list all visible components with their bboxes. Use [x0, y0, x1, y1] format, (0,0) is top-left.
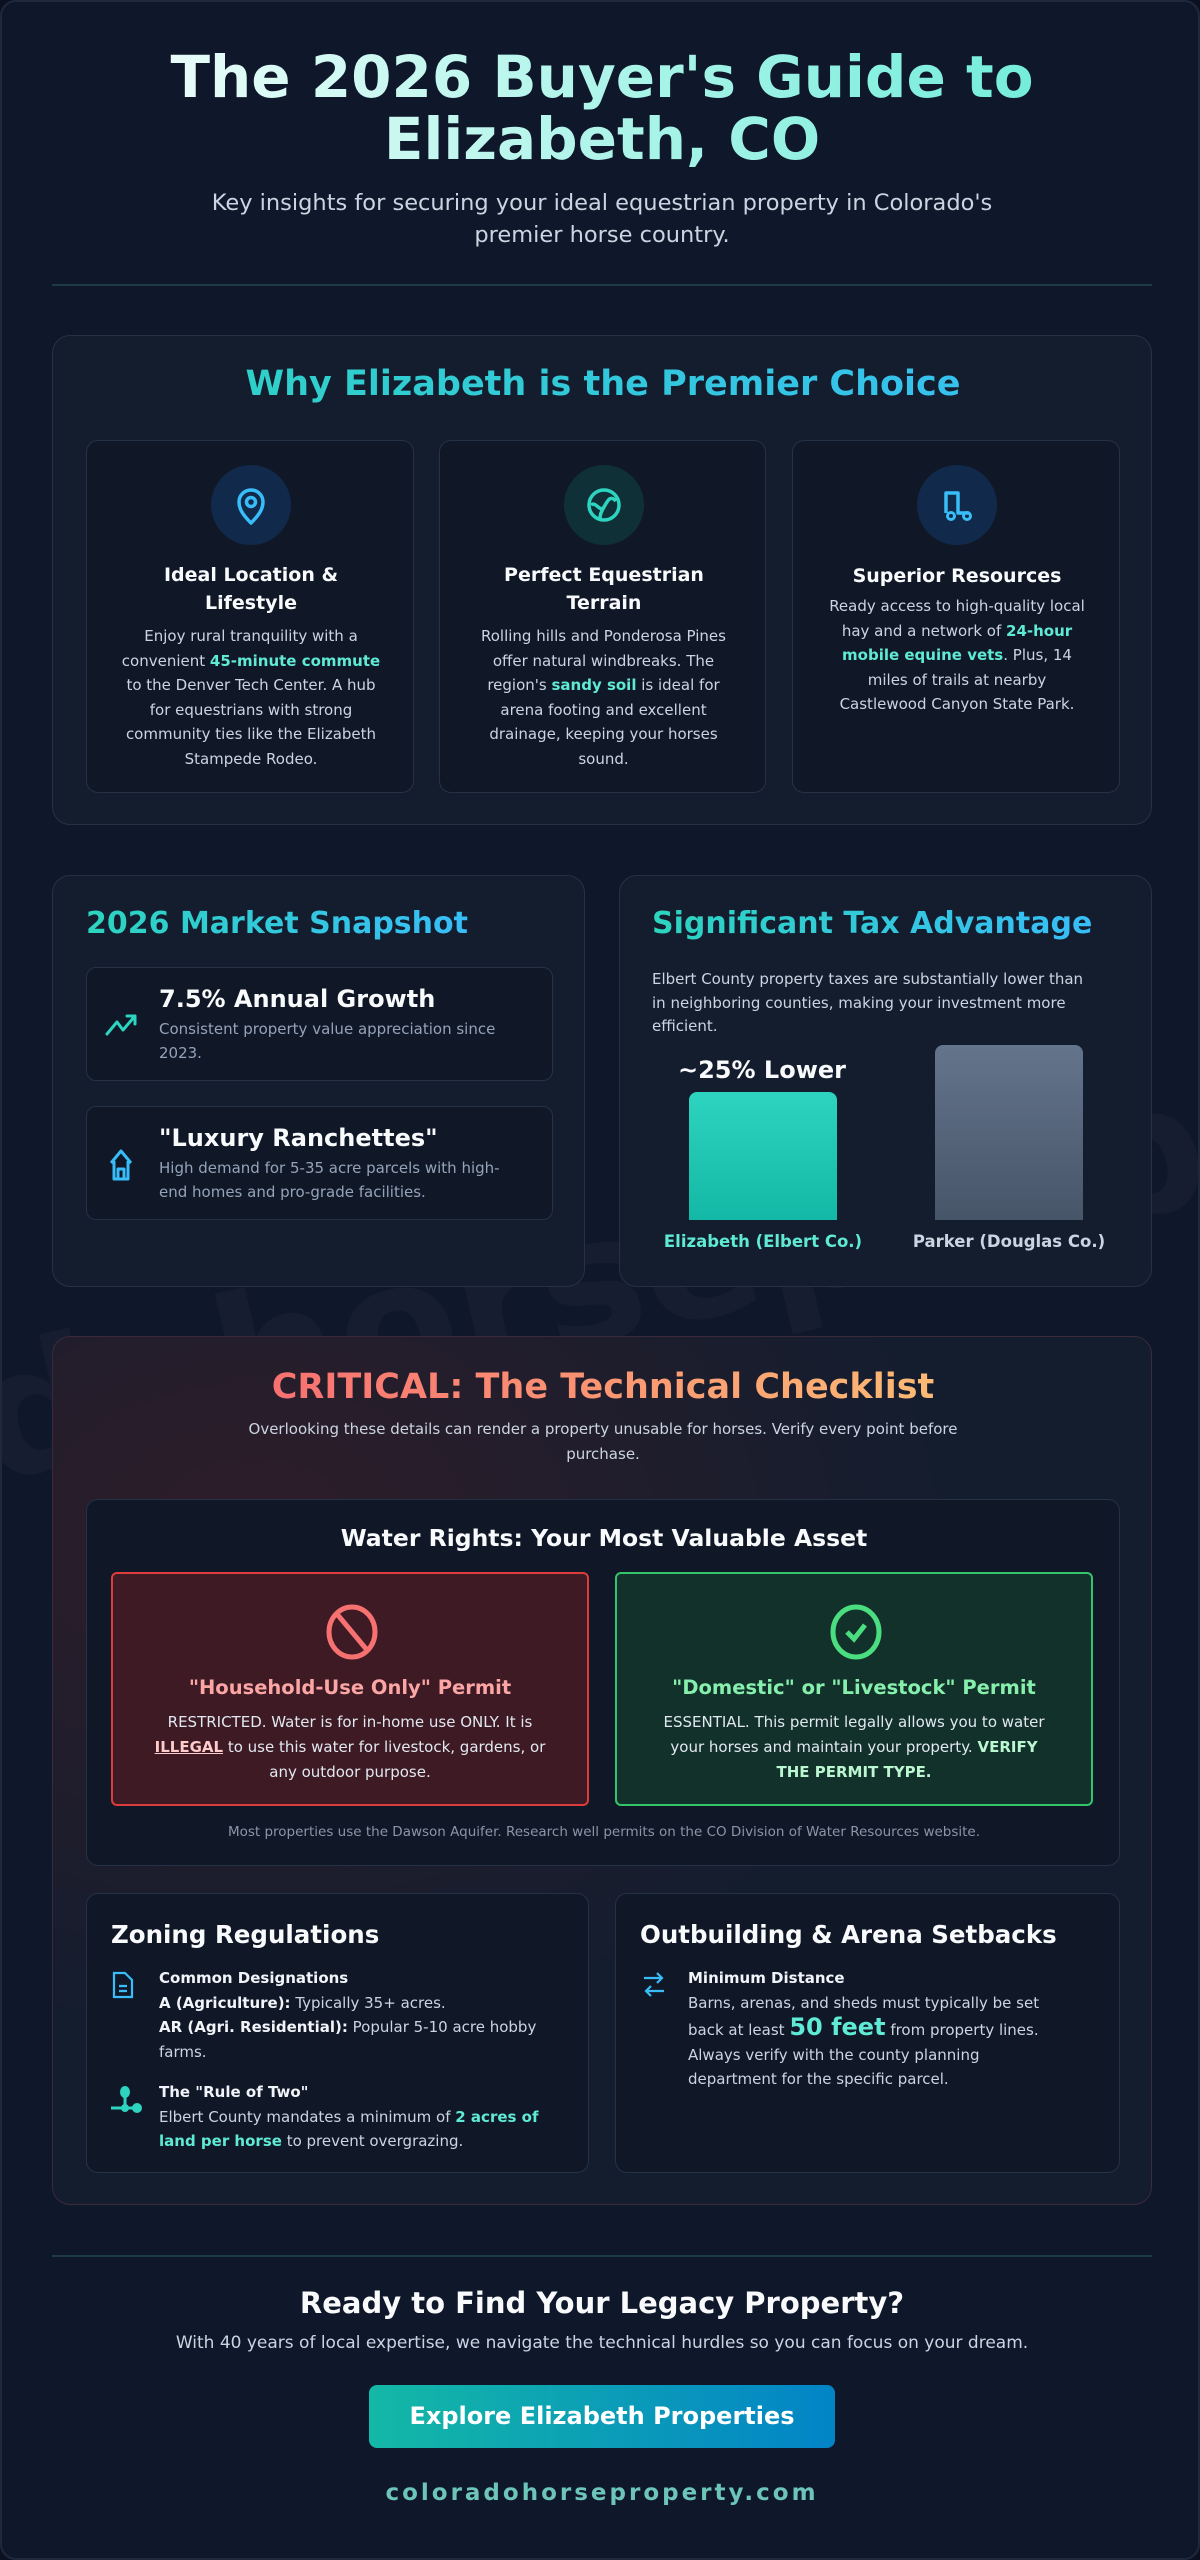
card body: Ready access to high-quality local hay and a network of 24-hour mobile equine vets. Plus, 14 miles of trails at nearby Castlewood Canyon State Park.	[829, 597, 1085, 713]
panel: market snapshot	[52, 875, 585, 1287]
icon: arrows	[644, 1972, 664, 1997]
icon: horse rule	[111, 2086, 142, 2113]
card title: Superior Resources	[853, 565, 1061, 587]
green permit: ESSENTIAL. This permit legally allows you to water your horses and maintain your property. VERIFY THE PERMIT TYPE.	[664, 1713, 1044, 1781]
heading: CRITICAL: The Technical Checklist	[272, 1367, 934, 1407]
zoning card: Elbert County mandates a minimum of 2 acres of land per horse to prevent overgrazing.	[159, 2108, 538, 2150]
heading: why elizabeth: Why Elizabeth is the Premier Choice	[245, 364, 961, 404]
bar chart: Parker (Douglas Co.)	[913, 1232, 1105, 1251]
zoning card: AR (Agri. Residential): Popular 5-10 acre hobby farms.	[159, 2018, 536, 2060]
heading: Water Rights: Your Most Valuable Asset	[341, 1524, 867, 1552]
stat: growth: 7.5% Annual Growth	[159, 985, 435, 1013]
icon: check	[830, 1604, 882, 1660]
title: The 2026 Buyer's Guide to Elizabeth, CO	[170, 43, 1034, 173]
zoning card: The "Rule of Two"	[159, 2083, 309, 2101]
button: Explore Elizabeth Properties	[409, 2402, 795, 2430]
zoning card: Zoning Regulations	[111, 1920, 379, 1949]
heading: Significant Tax Advantage	[652, 906, 1092, 941]
setbacks card: Barns, arenas, and sheds must typically be set back at least 50 feet from property lines. Always verify with the county planning department for the specific parcel.	[688, 1994, 1039, 2088]
red permit	[111, 1572, 589, 1806]
panel: technical checklist	[52, 1336, 1152, 2205]
green permit: "Domestic" or "Livestock" Permit	[672, 1676, 1036, 1699]
card title: Ideal Location & Lifestyle	[164, 564, 338, 614]
subtitle: Key insights for securing your ideal equestrian property in Colorado's premier horse country.	[212, 190, 992, 248]
icon: globe	[564, 465, 644, 545]
stat: ranchettes: "Luxury Ranchettes"	[159, 1124, 438, 1152]
icon: map pin	[211, 465, 291, 545]
bar chart	[664, 1045, 1105, 1251]
card: resources	[792, 440, 1120, 793]
card: location	[86, 440, 414, 793]
water rights box	[86, 1499, 1120, 1866]
zoning card	[86, 1893, 589, 2173]
card body: Rolling hills and Ponderosa Pines offer natural windbreaks. The region's sandy soil is ideal for arena footing and excellent drainage, keeping your horses sound.	[481, 627, 726, 768]
CTA heading: Ready to Find Your Legacy Property?	[300, 2286, 904, 2320]
icon: truck	[917, 465, 997, 545]
button	[369, 2385, 835, 2448]
panel: tax advantage	[619, 875, 1152, 1287]
url: coloradohorseproperty.com	[385, 2480, 819, 2506]
heading: why elizabeth	[53, 364, 1153, 404]
icon: trend	[105, 1014, 137, 1036]
zoning card: A (Agriculture): Typically 35+ acres.	[159, 1994, 446, 2012]
green permit	[615, 1572, 1093, 1806]
stat: ranchettes	[86, 1106, 553, 1220]
setbacks card: Outbuilding & Arena Setbacks	[640, 1920, 1057, 1949]
heading: 2026 Market Snapshot	[86, 906, 468, 941]
zoning card: Common Designations	[159, 1969, 348, 1987]
bar chart: ~25% Lower	[678, 1056, 846, 1084]
setbacks card: Minimum Distance	[688, 1969, 845, 1987]
icon: house	[110, 1149, 132, 1180]
card: terrain	[439, 440, 766, 793]
red permit: RESTRICTED. Water is for in-home use ONLY. It is ILLEGAL to use this water for livestock, gardens, or any outdoor purpose.	[155, 1713, 545, 1781]
panel: why elizabeth	[52, 335, 1152, 825]
CTA text: With 40 years of local expertise, we navigate the technical hurdles so you can focus on your dream.	[176, 2333, 1028, 2353]
title	[2, 46, 1200, 170]
subtext: Overlooking these details can render a property unusable for horses. Verify every point before purchase.	[249, 1420, 957, 1463]
stat: ranchettes: High demand for 5-35 acre parcels with high-end homes and pro-grade facilities.	[159, 1159, 500, 1201]
red permit: "Household-Use Only" Permit	[189, 1676, 511, 1699]
footnote: Most properties use the Dawson Aquifer. Research well permits on the CO Division of Water Resources website.	[228, 1824, 980, 1840]
icon: ban	[326, 1604, 378, 1660]
text: Elbert County property taxes are substantially lower than in neighboring counties, making your investment more efficient.	[652, 970, 1083, 1035]
icon: document	[112, 1972, 134, 1998]
card body: Enjoy rural tranquility with a convenient 45-minute commute to the Denver Tech Center. A hub for equestrians with strong community ties like the Elizabeth Stampede Rodeo.	[122, 627, 380, 768]
stat: growth: Consistent property value appreciation since 2023.	[159, 1020, 495, 1062]
card title: Perfect Equestrian Terrain	[504, 564, 704, 614]
bar chart: Elizabeth (Elbert Co.)	[664, 1232, 862, 1251]
stat: growth	[86, 967, 553, 1081]
setbacks card	[615, 1893, 1120, 2173]
